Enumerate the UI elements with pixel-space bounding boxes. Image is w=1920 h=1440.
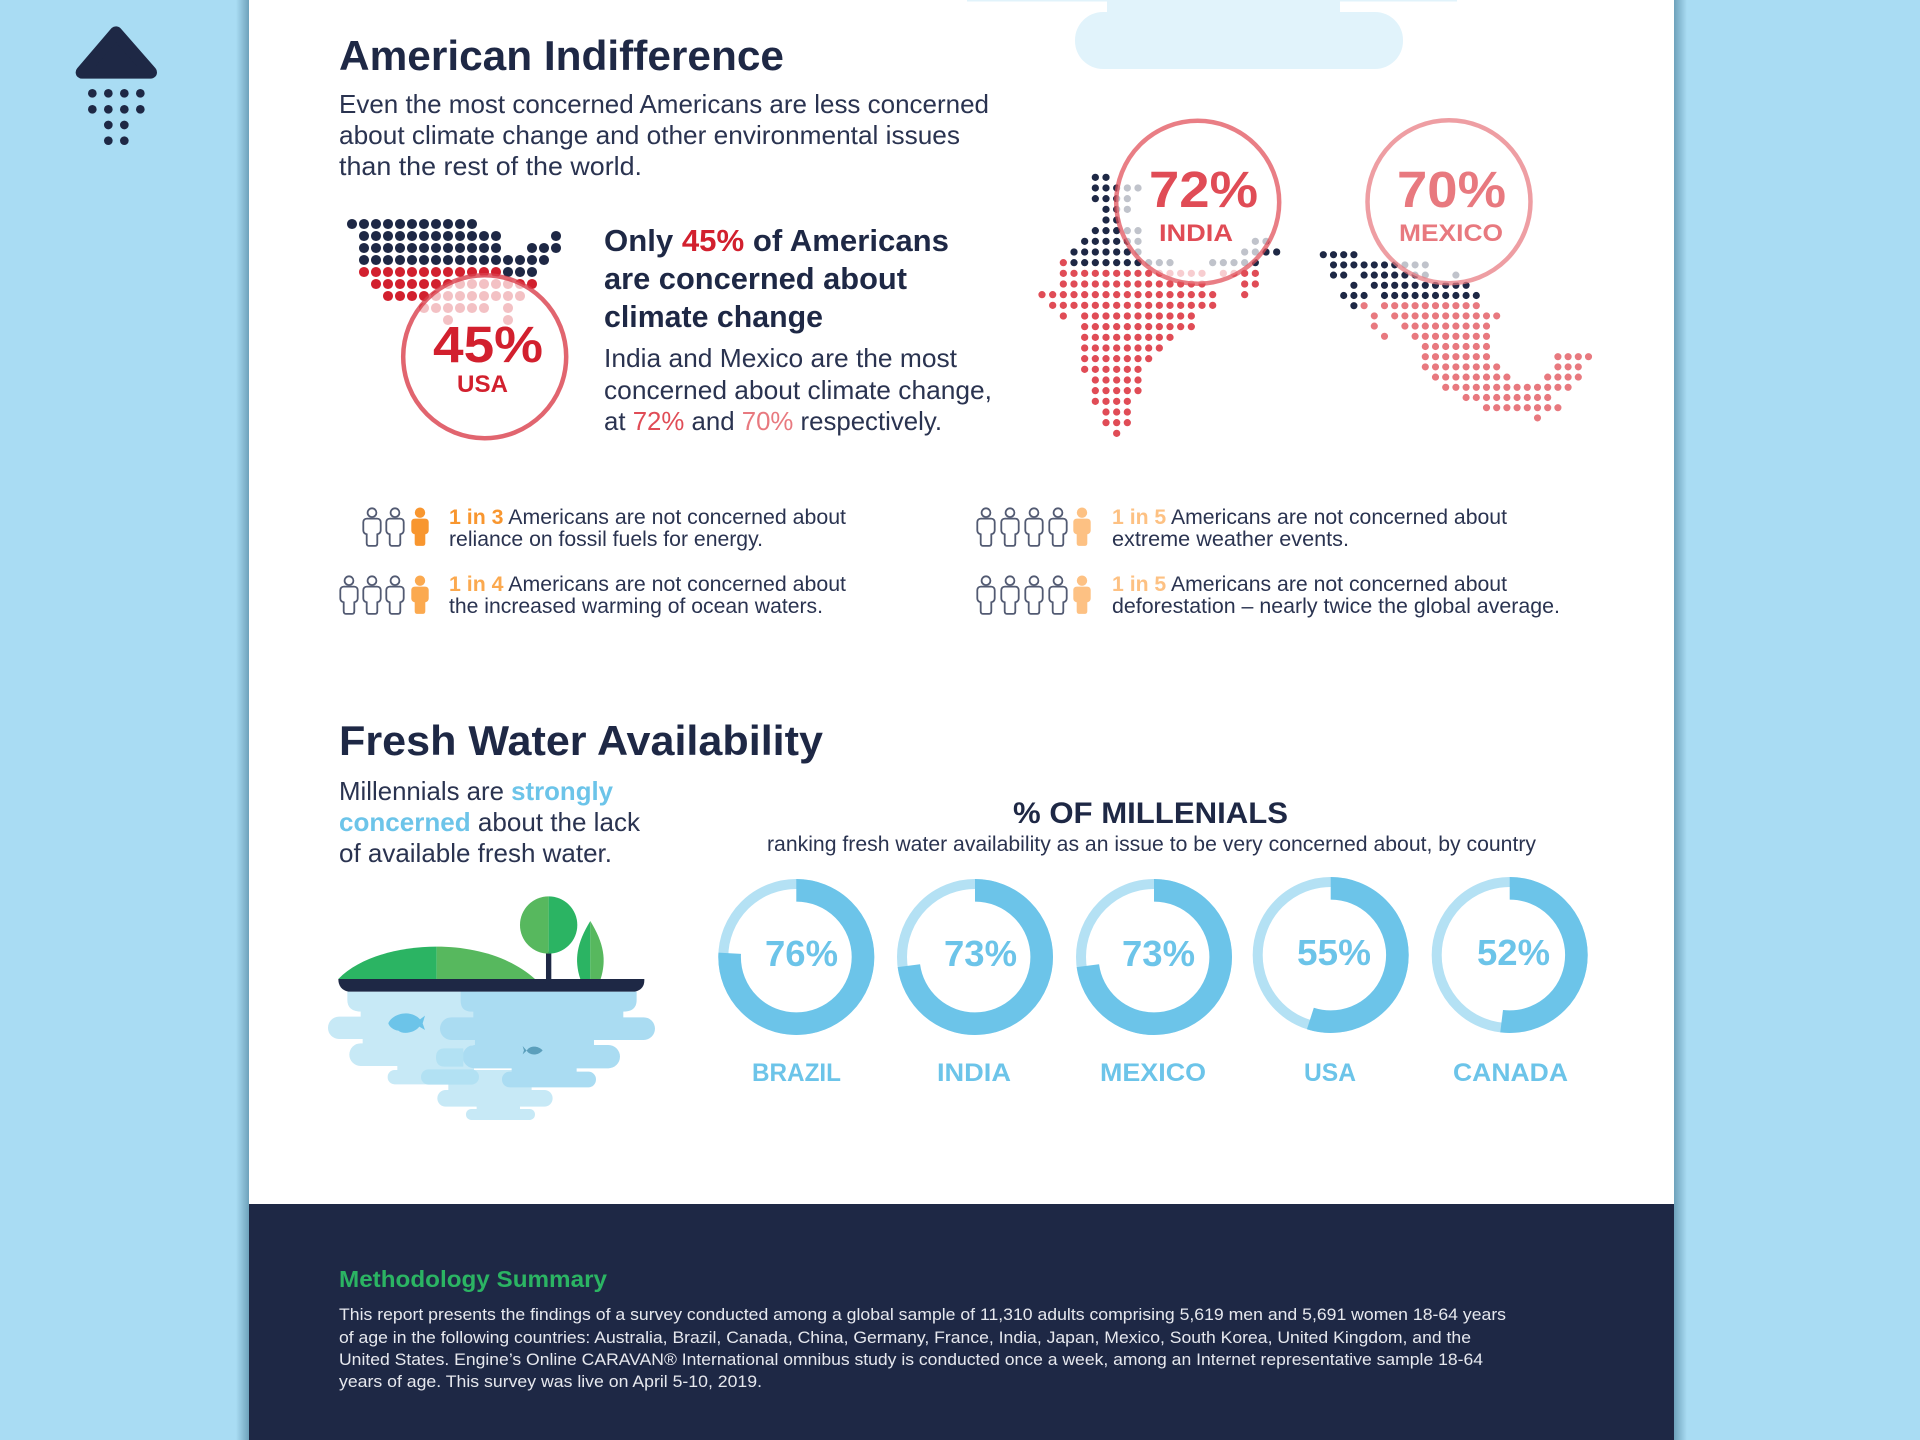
- donut: Mexico 73%: MEXICO: [1100, 1059, 1206, 1087]
- icon: shower logo: [82, 33, 151, 145]
- donut: Brazil 76%: BRAZIL: [752, 1059, 841, 1087]
- donut: USA 55%: 55%: [1297, 932, 1371, 973]
- chart: India dot map: [1042, 121, 1279, 433]
- stat: 1 in 4 ocean warming: [340, 572, 846, 618]
- light water: [328, 992, 553, 1120]
- stat: 1 in 5 deforestation: deforestation – nearly twice the global average.: [1112, 594, 1560, 618]
- text: millennials concern: of available fresh water.: [339, 838, 612, 868]
- stat: 1 in 4 ocean warming: 1 in 4 Americans are not concerned about: [449, 572, 846, 596]
- stat: 1 in 4 ocean warming: the increased warming of ocean waters.: [449, 594, 823, 618]
- donut: Mexico 73%: 73%: [1122, 933, 1195, 974]
- chart: Mexico dot map: 70%: [1397, 161, 1506, 218]
- stat: 1 in 5 extreme weather: extreme weather events.: [1112, 527, 1349, 551]
- trunk: [546, 952, 551, 980]
- chart: India dot map: 72%: [1149, 161, 1258, 218]
- illustration: island and water: [328, 896, 655, 1120]
- chart subtitle: ranking fresh water availability as an issue to be very concerned about, by country: [767, 833, 1536, 856]
- methodology body text: [339, 1306, 1506, 1391]
- hill: [338, 947, 437, 979]
- donut: India 73%: [902, 884, 1048, 1087]
- text: millennials concern: [339, 776, 641, 868]
- text: India and Mexico comparison: India and Mexico are the most: [604, 343, 958, 373]
- callout: only 45% of Americans: climate change: [604, 299, 823, 334]
- stat: 1 in 3 fossil fuels: [363, 505, 846, 551]
- section: Fresh Water Availability heading: Fresh Water Availability: [339, 717, 824, 764]
- intro text: Even the most concerned Americans are less concerned: [339, 89, 989, 119]
- stat: 1 in 5 extreme weather: [977, 505, 1507, 551]
- stat: 1 in 5 deforestation: 1 in 5 Americans are not concerned about: [1112, 572, 1507, 596]
- panel shadows: [236, 0, 1687, 1440]
- callout: only 45% of Americans: Only 45% of Americans: [604, 223, 949, 258]
- intro text: [339, 89, 989, 181]
- methodology body text: This report presents the findings of a survey conducted among a global sample of 11,310 adults comprising 5,619 men and 5,691 women 18-64 years: [339, 1306, 1506, 1324]
- chart: USA dot map: 45%: [433, 316, 543, 373]
- text: millennials concern: Millennials are strongly: [339, 776, 614, 806]
- panel: methodology footer: [249, 1204, 1674, 1440]
- chart: Mexico dot map: MEXICO: [1399, 220, 1503, 247]
- chart: USA dot map: USA: [457, 371, 508, 398]
- fish: [388, 1013, 425, 1033]
- intro text: than the rest of the world.: [339, 151, 642, 181]
- methodology heading: Methodology Summary: [339, 1266, 607, 1292]
- round tree: [520, 896, 549, 954]
- chart: India dot map: INDIA: [1159, 220, 1233, 247]
- donut: Canada 52%: 52%: [1477, 932, 1550, 973]
- callout: only 45% of Americans: are concerned about: [604, 261, 907, 296]
- donut: India 73%: 73%: [944, 933, 1017, 974]
- white content panel: [249, 0, 1674, 1204]
- ground: [338, 979, 644, 992]
- chart: Mexico dot map: [1323, 120, 1589, 418]
- decorative cloud at top: [967, 0, 1457, 69]
- dark water: [440, 992, 655, 1087]
- stat: 1 in 3 fossil fuels: reliance on fossil fuels for energy.: [449, 527, 763, 551]
- donut: USA 55%: [1258, 882, 1404, 1087]
- leaf tree: [577, 921, 590, 979]
- donut: Canada 52%: [1437, 882, 1583, 1087]
- chart heading: % of millenials: % OF MILLENIALS: [1013, 797, 1288, 830]
- callout: only 45% of Americans: [604, 223, 949, 334]
- stat: 1 in 5 extreme weather: 1 in 5 Americans are not concerned about: [1112, 505, 1507, 529]
- text: millennials concern: concerned about the lack: [339, 807, 641, 837]
- donut: Brazil 76%: [723, 884, 869, 1087]
- intro text: about climate change and other environmental issues: [339, 120, 960, 150]
- section: American Indifference heading: American Indifference: [339, 32, 784, 79]
- methodology body text: years of age. This survey was live on April 5-10, 2019.: [339, 1373, 762, 1391]
- donut: Mexico 73%: [1081, 884, 1227, 1087]
- methodology body text: of age in the following countries: Australia, Brazil, Canada, China, Germany, France, India, Japan, Mexico, South Korea, United Kingdom, and the: [339, 1329, 1471, 1347]
- text: India and Mexico comparison: concerned about climate change,: [604, 375, 992, 405]
- donut: USA 55%: USA: [1304, 1059, 1356, 1087]
- donut: India 73%: INDIA: [937, 1059, 1011, 1087]
- chart: USA dot map: [352, 224, 566, 438]
- text: India and Mexico comparison: at 72% and 70% respectively.: [604, 406, 942, 436]
- stat: 1 in 3 fossil fuels: 1 in 3 Americans are not concerned about: [449, 505, 846, 529]
- donut: Brazil 76%: 76%: [765, 933, 838, 974]
- stat: 1 in 5 deforestation: [977, 572, 1560, 618]
- methodology body text: United States. Engine’s Online CARAVAN® International omnibus study is conducted once a week, among an Internet representative sample 18-64: [339, 1351, 1483, 1369]
- donut: Canada 52%: CANADA: [1453, 1059, 1568, 1087]
- mid water: [421, 1048, 479, 1085]
- text: India and Mexico comparison: [604, 343, 992, 436]
